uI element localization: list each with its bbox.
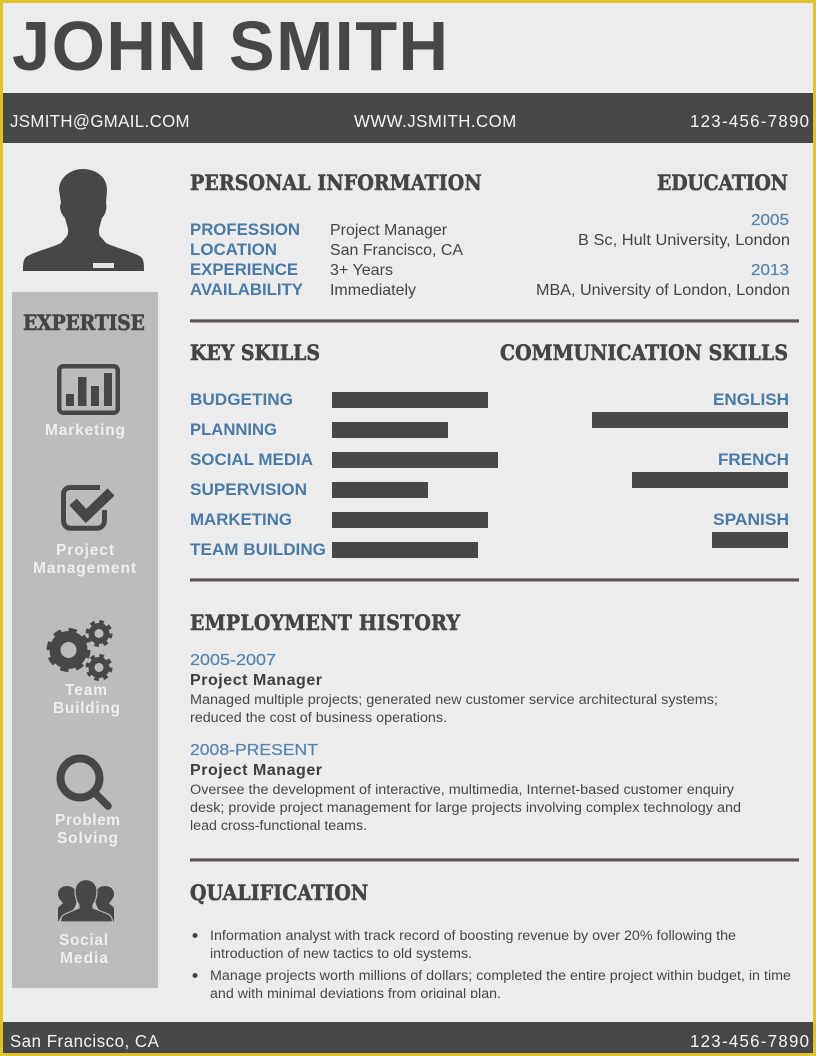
bar chart: key skills: TEAM BUILDING xyxy=(190,540,326,559)
job: 2005-2007: Managed multiple projects; generated new customer service architectural systems; xyxy=(190,692,718,707)
job: 2005-2007: reduced the cost of business operations. xyxy=(190,710,447,725)
label: project management: Project xyxy=(56,542,114,559)
panel: education: MBA, University of London, London xyxy=(536,282,790,299)
job: 2008-present: Project Manager xyxy=(190,762,322,779)
panel: expertise sidebar xyxy=(12,292,158,988)
panel: personal information: EXPERIENCE xyxy=(190,260,298,279)
panel: personal information: San Francisco, CA xyxy=(330,242,463,259)
icon: checkbox xyxy=(64,488,111,528)
label: team building: Building xyxy=(53,700,120,717)
title: name: JOHN SMITH xyxy=(12,6,448,85)
job: 2005-2007 xyxy=(190,652,718,725)
panel: personal information: PROFESSION xyxy=(190,220,300,239)
heading: expertise: EXPERTISE xyxy=(23,310,145,335)
label: problem solving: Solving xyxy=(57,830,118,847)
footer bar: 123-456-7890 xyxy=(690,1031,809,1051)
panel: personal information: Immediately xyxy=(330,282,416,299)
bar chart: key skills: PLANNING xyxy=(190,420,277,439)
bar chart: key skills: SOCIAL MEDIA xyxy=(190,450,313,469)
bar chart: languages xyxy=(592,390,789,548)
job: 2008-present: Oversee the development of interactive, multimedia, Internet-based customer enquiry xyxy=(190,782,734,797)
bullet list xyxy=(192,928,791,1004)
panel: education: 2005 xyxy=(751,212,789,229)
contact bar: 123-456-7890 xyxy=(690,111,809,131)
panel: education xyxy=(536,170,790,299)
label: team building: Team xyxy=(65,682,107,699)
bullet list: introduction of new tactics to old systems. xyxy=(210,946,472,961)
panel: personal information xyxy=(190,170,482,299)
bar chart: key skills: SUPERVISION xyxy=(190,480,307,499)
heading: education: EDUCATION xyxy=(657,170,788,195)
label: project management: Management xyxy=(33,560,136,577)
panel: key skills xyxy=(190,340,498,559)
bullet list: Information analyst with track record of boosting revenue by over 20% following the xyxy=(210,928,736,943)
panel: personal information: LOCATION xyxy=(190,240,277,259)
contact bar: WWW.JSMITH.COM xyxy=(354,111,516,131)
bar chart: languages: ENGLISH xyxy=(713,390,789,409)
panel: employment history xyxy=(190,610,741,833)
job: 2008-present: desk; provide project management for large projects involving complex technology and xyxy=(190,800,741,815)
job: 2008-present xyxy=(190,742,741,833)
icon: people group xyxy=(58,880,114,922)
icon: profile silhouette xyxy=(23,169,144,271)
label: social media xyxy=(59,932,108,967)
job: 2008-present: 2008-PRESENT xyxy=(190,742,318,759)
bar chart: languages: FRENCH xyxy=(718,450,789,469)
job: 2005-2007: Project Manager xyxy=(190,672,322,689)
label: marketing: Marketing xyxy=(45,422,125,439)
label: project management xyxy=(33,542,136,577)
footer bar xyxy=(3,1022,813,1053)
bar chart: key skills: BUDGETING xyxy=(190,390,293,409)
panel: qualification xyxy=(190,880,791,1004)
bar chart: languages: SPANISH xyxy=(713,510,789,529)
icon: bar chart xyxy=(59,366,118,413)
label: team building xyxy=(53,682,120,717)
bullet list: Manage projects worth millions of dollars; completed the entire project within budget, in time xyxy=(210,968,791,983)
panel: education: B Sc, Hult University, London xyxy=(578,232,790,249)
panel: personal information: AVAILABILITY xyxy=(190,280,304,299)
footer bar: San Francisco, CA xyxy=(10,1031,159,1051)
heading: employment history: EMPLOYMENT HISTORY xyxy=(190,610,461,635)
bar chart: key skills xyxy=(190,390,498,559)
label: problem solving xyxy=(55,812,120,847)
bar chart: key skills: MARKETING xyxy=(190,510,292,529)
panel: communication skills xyxy=(500,340,789,548)
contact bar: JSMITH@GMAIL.COM xyxy=(10,111,190,131)
label: social media: Media xyxy=(60,950,108,967)
heading: communication skills: COMMUNICATION SKILLS xyxy=(500,340,788,365)
panel: personal information: Project Manager xyxy=(330,222,448,239)
icon: magnifier xyxy=(60,758,108,806)
bullet list: and with minimal deviations from original plan. xyxy=(210,986,501,1001)
heading: personal information: PERSONAL INFORMATION xyxy=(190,170,482,195)
contact bar xyxy=(3,93,813,143)
label: problem solving: Problem xyxy=(55,812,120,829)
job: 2008-present: lead cross-functional teams. xyxy=(190,818,367,833)
panel: education: 2013 xyxy=(751,262,789,279)
panel: personal information: 3+ Years xyxy=(330,262,393,279)
label: social media: Social xyxy=(59,932,108,949)
heading: qualification: QUALIFICATION xyxy=(190,880,368,905)
job: 2005-2007: 2005-2007 xyxy=(190,652,276,669)
heading: key skills: KEY SKILLS xyxy=(190,340,320,365)
icon: gears xyxy=(49,622,110,679)
